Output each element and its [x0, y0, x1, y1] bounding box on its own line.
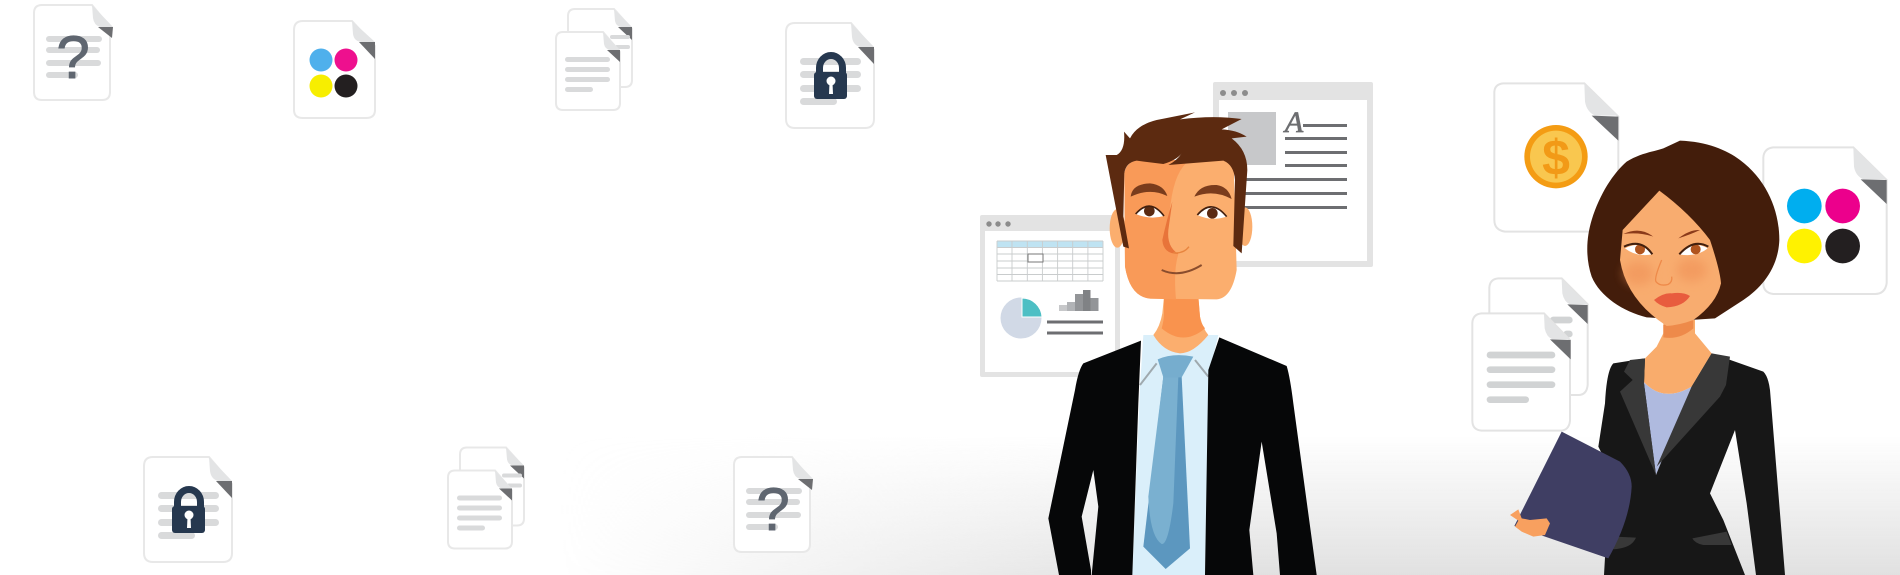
- hair: [1106, 112, 1247, 253]
- table: [997, 241, 1103, 281]
- eyes: [1625, 245, 1708, 255]
- pie chart: [1000, 298, 1042, 338]
- face: [1620, 191, 1721, 326]
- icon: dollar document: [1494, 83, 1618, 232]
- mouth: [1162, 265, 1202, 273]
- mouth: [1654, 293, 1690, 307]
- jacket: [1598, 353, 1785, 575]
- hair: [1587, 141, 1779, 320]
- eyebrows: [1131, 183, 1232, 199]
- icon: CMYK document top: [294, 21, 375, 118]
- eyes: [1136, 206, 1227, 219]
- icon: lock document top: [786, 23, 874, 128]
- neck: [1153, 297, 1208, 353]
- icon: dollar document: $: [1542, 130, 1570, 186]
- nose: [1656, 260, 1672, 285]
- eyebrows: [1623, 230, 1700, 238]
- background floor gradient: [727, 472, 1900, 575]
- icon: stacked documents bottom: [448, 448, 524, 548]
- icon: question document top: [34, 5, 113, 100]
- top: [1643, 382, 1692, 475]
- illustration: man in suit: [1048, 112, 1317, 575]
- shirt: [1132, 335, 1218, 575]
- chest and neck: [1643, 320, 1712, 394]
- icon: question document top: ?: [56, 24, 90, 91]
- icon: question document bottom: ?: [756, 476, 790, 543]
- folder: [1514, 432, 1632, 558]
- pockets: [1613, 532, 1732, 549]
- illustration: woman in suit: [1510, 141, 1785, 575]
- bar chart: [1059, 290, 1098, 311]
- tie: [1143, 377, 1190, 569]
- panel: text document window: [1213, 82, 1373, 267]
- icon: CMYK document large: [1763, 147, 1887, 294]
- icon: stacked documents large: [1472, 278, 1588, 431]
- suit: [1048, 337, 1317, 575]
- icon: lock document bottom: [144, 457, 232, 562]
- icon: stacked documents top: [556, 9, 632, 110]
- ears: [1110, 209, 1125, 248]
- lapels: [1620, 353, 1730, 475]
- hand: [1510, 509, 1550, 537]
- icon: question document bottom: [734, 457, 813, 552]
- face: [1124, 160, 1237, 299]
- panel: text document window: A: [1283, 106, 1304, 139]
- panel: spreadsheet and chart window: [980, 215, 1120, 377]
